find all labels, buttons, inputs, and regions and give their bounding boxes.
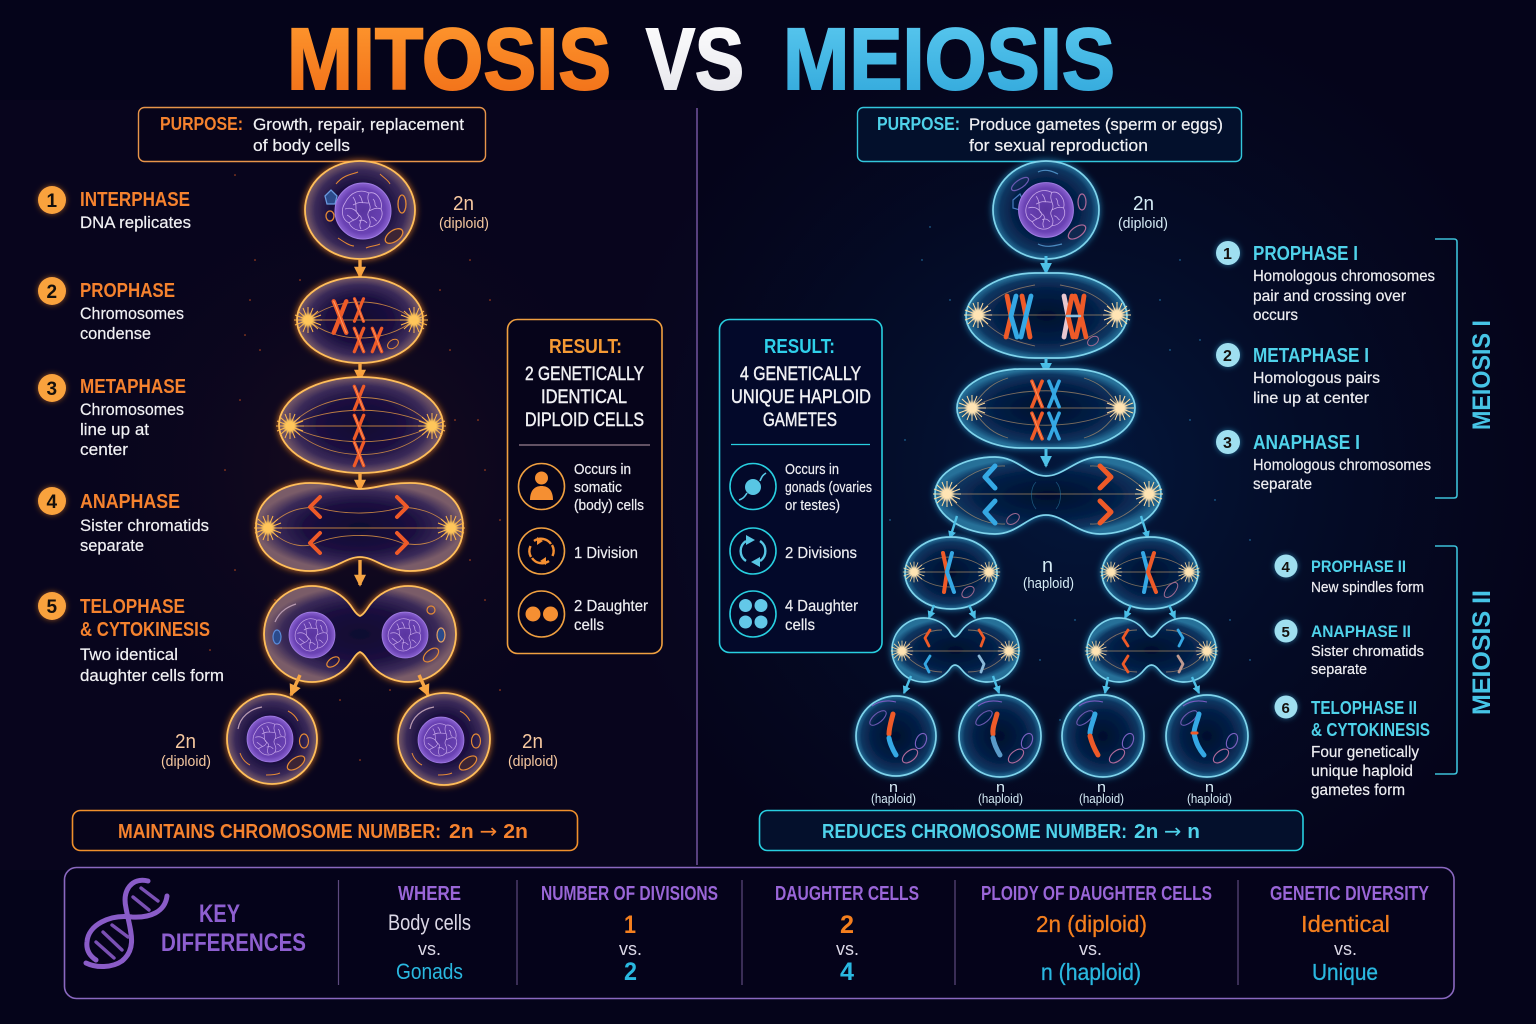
- banner: maintains chromosome number: MAINTAINS CHROMOSOME NUMBER:: [118, 821, 441, 843]
- label: n haploid middle: n: [1042, 555, 1053, 577]
- arrow: [358, 473, 362, 490]
- title: [287, 11, 1115, 108]
- text: somatic: (body) cells: [574, 497, 644, 514]
- heading: key differences: [161, 900, 306, 957]
- arrow: [291, 675, 300, 695]
- arrow: [358, 259, 362, 277]
- step: metaphase I: line up at center: [1253, 390, 1370, 407]
- label: 2n diploid right: [508, 731, 558, 770]
- column: genetic diversity: [1270, 883, 1430, 985]
- icon: gonad: [730, 464, 776, 510]
- step: telophase: daughter cells form: [80, 666, 224, 685]
- labels: n haploid row: n: [889, 779, 898, 796]
- labels: n haploid row: (haploid): [871, 791, 916, 806]
- title: VS: [646, 11, 744, 108]
- cell: metaphase: [276, 377, 446, 473]
- text: gonads: gonads (ovaries: [785, 479, 872, 496]
- step: telophase: 5: [46, 597, 58, 618]
- label: 2n diploid: (diploid): [1118, 216, 1168, 232]
- result text: UNIQUE HAPLOID: [731, 387, 871, 408]
- step: metaphase: line up at: [80, 420, 149, 439]
- arrow: [969, 605, 975, 618]
- arrow: [1125, 605, 1131, 618]
- text: one division: 1 Division: [574, 545, 638, 562]
- step: metaphase: [38, 374, 186, 459]
- step: prophase: [38, 277, 184, 343]
- step: anaphase I: ANAPHASE I: [1253, 432, 1360, 454]
- step: metaphase: METAPHASE: [80, 376, 186, 398]
- step: telophase: Two identical: [80, 645, 178, 664]
- step: telophase: & CYTOKINESIS: [80, 619, 210, 641]
- column: genetic diversity: Identical: [1301, 911, 1390, 937]
- cell: anaphase: [254, 483, 465, 571]
- step: prophase: Chromosomes: [80, 304, 184, 323]
- text: gonads: or testes): [785, 497, 840, 514]
- step: anaphase II: Sister chromatids: [1311, 644, 1424, 660]
- cell: metaphase I: [957, 369, 1135, 448]
- icon: two daughter cells: [518, 591, 564, 637]
- cell: haploid 3: [1062, 695, 1144, 777]
- step: telophase II: TELOPHASE II: [1311, 698, 1417, 718]
- text: somatic: somatic: [574, 479, 622, 496]
- panel: meiosis result: [720, 320, 882, 652]
- text: two daughter cells: cells: [574, 617, 604, 634]
- result text: 4 GENETICALLY: [740, 364, 861, 385]
- column: number of divisions: [541, 883, 718, 986]
- label: 2n diploid right: (diploid): [508, 754, 558, 770]
- step: prophase I: pair and crossing over: [1253, 288, 1407, 305]
- column: genetic diversity: Unique: [1312, 959, 1378, 985]
- arrow: [904, 676, 911, 693]
- cell: anaphase I: [933, 457, 1163, 534]
- label: 2n diploid left: [161, 731, 211, 770]
- panel: meiosis purpose: PURPOSE:: [877, 114, 960, 134]
- column: number of divisions: vs.: [619, 939, 642, 959]
- text: somatic: Occurs in: [574, 461, 631, 478]
- column: where: Body cells: [388, 910, 471, 935]
- cell: prophase: [294, 277, 428, 363]
- cell: prophase II left: [903, 537, 1000, 609]
- step: prophase I: 1: [1223, 246, 1232, 263]
- cell: daughter right: [398, 693, 490, 785]
- result text: [731, 364, 871, 431]
- step: interphase: [38, 186, 191, 232]
- step: telophase II: [1274, 696, 1430, 799]
- title: MITOSIS: [287, 11, 611, 108]
- step: prophase: condense: [80, 324, 151, 343]
- label: meiosis I: MEIOSIS I: [1468, 320, 1496, 430]
- labels: n haploid row: [871, 779, 1232, 806]
- label: n haploid middle: [1023, 555, 1074, 592]
- step: telophase II: unique haploid: [1311, 763, 1413, 780]
- title: MEIOSIS: [783, 11, 1115, 108]
- meiosis cell diagram: [856, 161, 1248, 806]
- label: 2n diploid left: (diploid): [161, 754, 211, 770]
- result text: GAMETES: [763, 410, 837, 431]
- result text: IDENTICAL: [541, 387, 627, 408]
- arrow: [993, 676, 999, 693]
- column: daughter cells: 4: [840, 958, 854, 986]
- label: 2n diploid top: 2n: [453, 193, 474, 215]
- cell: haploid 1: [856, 696, 936, 776]
- text: gonads: [785, 461, 872, 514]
- step: prophase II: 4: [1282, 559, 1290, 576]
- label: 2n diploid top: (diploid): [439, 216, 489, 232]
- step: interphase: DNA replicates: [80, 213, 191, 232]
- cell: prophase I: [964, 273, 1131, 358]
- step: anaphase: 4: [46, 492, 58, 513]
- column: number of divisions: 2: [624, 958, 637, 986]
- meiosis I steps: [1216, 239, 1496, 498]
- column: where: Gonads: [396, 959, 463, 984]
- column: genetic diversity: GENETIC DIVERSITY: [1270, 883, 1430, 905]
- step: anaphase I: 3: [1223, 435, 1232, 452]
- step: anaphase: [38, 487, 209, 555]
- banner: reduces chromosome number: 2n → n: [1134, 819, 1200, 843]
- arrow: [1044, 358, 1048, 373]
- label: meiosis II: MEIOSIS II: [1468, 590, 1496, 715]
- step: prophase II: New spindles form: [1311, 580, 1424, 596]
- step: anaphase: separate: [80, 536, 144, 555]
- column: where: WHERE: [398, 883, 461, 905]
- cell: telophase: [264, 586, 456, 682]
- labels: n haploid row: n: [1097, 779, 1106, 796]
- step: metaphase I: Homologous pairs: [1253, 370, 1380, 387]
- panel: mitosis purpose: PURPOSE:: [160, 114, 243, 134]
- text: gonads: Occurs in: [785, 461, 839, 478]
- step: prophase: PROPHASE: [80, 280, 175, 302]
- step: metaphase I: [1216, 343, 1380, 407]
- text: four daughter cells: cells: [785, 617, 815, 634]
- column: daughter cells: DAUGHTER CELLS: [775, 883, 919, 905]
- step: prophase: 2: [46, 282, 57, 303]
- panel: mitosis purpose: [138, 108, 486, 162]
- arrow: [358, 560, 362, 585]
- panel: mitosis result: [508, 320, 662, 654]
- banner: reduces chromosome number: [760, 810, 1303, 850]
- column: ploidy: n (haploid): [1041, 959, 1141, 985]
- cell: haploid 2: [959, 695, 1041, 777]
- result text: [525, 364, 644, 431]
- mitosis cell diagram: [161, 161, 558, 785]
- step: telophase II: 6: [1282, 700, 1290, 717]
- step: prophase I: [1216, 241, 1435, 324]
- step: metaphase I: 2: [1223, 348, 1232, 365]
- panel: mitosis purpose: Growth, repair, replacement: [253, 115, 464, 134]
- step: telophase: TELOPHASE: [80, 596, 185, 618]
- step: prophase I: Homologous chromosomes: [1253, 268, 1435, 285]
- bracket: meiosis II: [1435, 546, 1457, 774]
- icon: DNA helix: [86, 880, 167, 967]
- panel: meiosis purpose: for sexual reproduction: [969, 136, 1148, 155]
- column: where: vs.: [418, 939, 441, 959]
- label: n haploid middle: (haploid): [1023, 576, 1074, 592]
- column: daughter cells: 2: [840, 911, 854, 939]
- arrow: [950, 516, 957, 538]
- arrow: [1169, 605, 1175, 618]
- column: ploidy: [981, 883, 1212, 985]
- cell: anaphase II right: [1085, 618, 1218, 682]
- cell: anaphase II left: [891, 618, 1020, 682]
- labels: n haploid row: (haploid): [978, 791, 1023, 806]
- icon: four daughter cells: [730, 591, 776, 637]
- label: 2n diploid top: [439, 193, 489, 232]
- labels: n haploid row: n: [996, 779, 1005, 796]
- icon: one division cycle: [518, 528, 564, 574]
- panel: meiosis purpose: [858, 108, 1242, 162]
- step: interphase: 1: [46, 191, 58, 212]
- panel: meiosis purpose: Produce gametes (sperm or eggs): [969, 115, 1223, 134]
- text: four daughter cells: [785, 598, 859, 634]
- step: anaphase I: Homologous chromosomes: [1253, 457, 1431, 474]
- label: 2n diploid: [1118, 193, 1168, 232]
- step: prophase II: PROPHASE II: [1311, 557, 1406, 576]
- column: number of divisions: 1: [624, 911, 636, 939]
- cell: interphase: [993, 161, 1099, 259]
- step: telophase II: Four genetically: [1311, 744, 1419, 761]
- arrow: [1105, 677, 1108, 693]
- step: metaphase: center: [80, 440, 128, 459]
- mitosis steps list: [38, 186, 224, 685]
- labels: n haploid row: (haploid): [1187, 791, 1232, 806]
- label: 2n diploid: 2n: [1133, 193, 1154, 215]
- column: ploidy: PLOIDY OF DAUGHTER CELLS: [981, 883, 1212, 905]
- panel: mitosis purpose: of body cells: [253, 136, 350, 155]
- cell: daughter left: [227, 694, 317, 784]
- step: anaphase II: 5: [1282, 624, 1290, 641]
- label: 2n diploid right: 2n: [522, 731, 543, 753]
- meiosis II steps: [1274, 546, 1496, 799]
- column: where: [388, 883, 471, 984]
- step: anaphase II: separate: [1311, 662, 1367, 678]
- cell: prophase II right: [1100, 537, 1200, 609]
- result text: DIPLOID CELLS: [525, 410, 644, 431]
- column: genetic diversity: vs.: [1334, 939, 1357, 959]
- banner: maintains chromosome number: 2n → 2n: [449, 819, 528, 843]
- icon: two divisions cycle: [730, 528, 776, 574]
- step: metaphase I: METAPHASE I: [1253, 345, 1369, 367]
- step: interphase: INTERPHASE: [80, 189, 190, 211]
- arrow: [358, 363, 362, 380]
- text: two divisions: 2 Divisions: [785, 545, 857, 562]
- arrow: [1044, 256, 1048, 273]
- step: anaphase II: ANAPHASE II: [1311, 622, 1411, 641]
- column: ploidy: 2n (diploid): [1036, 911, 1147, 937]
- heading: RESULT:: [764, 336, 835, 358]
- step: metaphase: Chromosomes: [80, 400, 184, 419]
- column: ploidy: vs.: [1079, 939, 1102, 959]
- heading: key differences: DIFFERENCES: [161, 929, 306, 957]
- arrow: [929, 605, 934, 618]
- step: anaphase II: [1274, 620, 1424, 678]
- text: two daughter cells: [574, 598, 649, 634]
- arrow: [1141, 516, 1148, 538]
- step: telophase II: & CYTOKINESIS: [1311, 720, 1430, 740]
- text: two daughter cells: 2 Daughter: [574, 598, 649, 615]
- banner: reduces chromosome number: REDUCES CHROMOSOME NUMBER:: [822, 821, 1127, 843]
- column: number of divisions: NUMBER OF DIVISIONS: [541, 883, 718, 905]
- step: prophase II: [1274, 554, 1424, 596]
- label: 2n diploid left: 2n: [175, 731, 196, 753]
- labels: n haploid row: (haploid): [1079, 791, 1124, 806]
- result text: 2 GENETICALLY: [525, 364, 644, 385]
- labels: n haploid row: n: [1205, 779, 1214, 796]
- step: anaphase I: [1216, 430, 1431, 493]
- column: daughter cells: [775, 883, 919, 986]
- cell: haploid 4: [1166, 695, 1248, 777]
- heading: RESULT:: [549, 336, 622, 358]
- step: anaphase I: separate: [1253, 476, 1312, 493]
- column: daughter cells: vs.: [836, 939, 859, 959]
- step: telophase II: gametes form: [1311, 782, 1405, 799]
- arrow: [1044, 448, 1048, 466]
- step: metaphase: 3: [46, 379, 57, 400]
- text: somatic: [574, 461, 644, 514]
- heading: key differences: KEY: [199, 900, 240, 928]
- arrow: [419, 675, 428, 695]
- step: prophase I: occurs: [1253, 307, 1298, 324]
- bracket: meiosis I: [1435, 239, 1457, 498]
- center divider: [696, 108, 698, 865]
- step: telophase: [38, 592, 224, 685]
- icon: person: [518, 464, 564, 510]
- banner: maintains chromosome number: [72, 810, 578, 850]
- step: prophase I: PROPHASE I: [1253, 243, 1358, 265]
- text: four daughter cells: 4 Daughter: [785, 598, 859, 615]
- panel: key differences: [64, 868, 1454, 998]
- step: anaphase: Sister chromatids: [80, 516, 209, 535]
- arrow: [1192, 677, 1199, 693]
- cell: interphase: [305, 161, 415, 259]
- step: anaphase: ANAPHASE: [80, 491, 180, 513]
